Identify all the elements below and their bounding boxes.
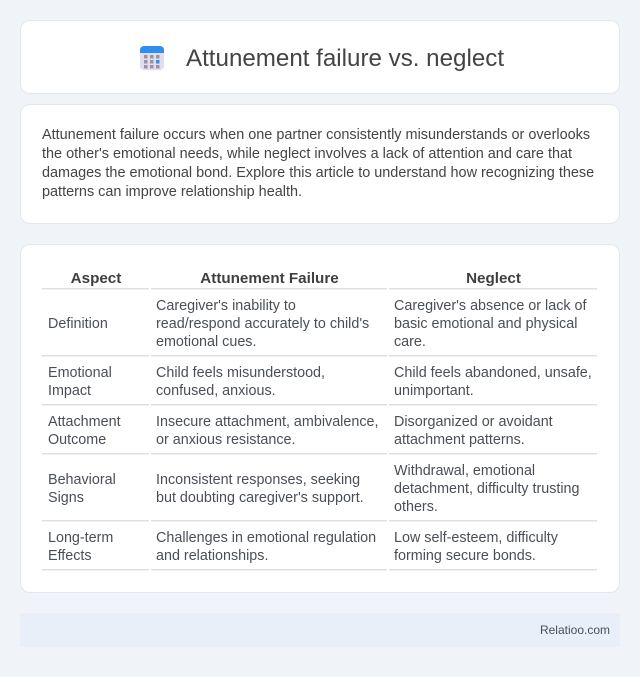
intro paragraph: Attunement failure occurs when one partner consistently misunderstands or overlooks xyxy=(42,127,590,143)
row: Long-term Effects: Effects xyxy=(48,548,92,564)
row: Emotional Impact: Child feels abandoned, unsafe, xyxy=(394,365,592,381)
row: Behavioral Signs: Withdrawal, emotional xyxy=(394,463,535,479)
row: Emotional Impact: Emotional xyxy=(48,365,112,381)
row: Long-term Effects: Long-term xyxy=(48,530,113,546)
row: Emotional Impact: confused, anxious. xyxy=(156,383,276,399)
panel: comparison table xyxy=(20,244,620,593)
row: Emotional Impact: Child feels misunderstood, xyxy=(156,365,325,381)
row: Long-term Effects xyxy=(48,530,558,564)
row: Emotional Impact: unimportant. xyxy=(394,383,474,399)
row: Definition: Caregiver's absence or lack of xyxy=(394,298,586,314)
row: Definition: Caregiver's inability to xyxy=(156,298,296,314)
footer credit: Relatioo.com xyxy=(540,623,610,637)
row: Behavioral Signs: Behavioral xyxy=(48,472,116,488)
row: Long-term Effects: and relationships. xyxy=(156,548,268,564)
row: Behavioral Signs: but doubting caregiver's support. xyxy=(156,490,364,506)
intro paragraph: patterns can improve relationship health. xyxy=(42,184,302,200)
table header: Aspect xyxy=(71,270,121,287)
row: Long-term Effects: forming secure bonds. xyxy=(394,548,536,564)
row: Behavioral Signs: Inconsistent responses, seeking xyxy=(156,472,360,488)
icon: calendar xyxy=(140,46,164,70)
row: Attachment Outcome: Insecure attachment, ambivalence, xyxy=(156,414,378,430)
row: Long-term Effects: Low self-esteem, difficulty xyxy=(394,530,558,546)
row: Emotional Impact: Impact xyxy=(48,383,91,399)
intro paragraph xyxy=(42,127,594,200)
row: Behavioral Signs xyxy=(48,463,580,515)
footer bar xyxy=(20,613,620,647)
row: Definition: emotional cues. xyxy=(156,334,256,350)
table header: Attunement Failure xyxy=(200,270,339,287)
table header xyxy=(71,270,521,287)
panel: title card xyxy=(20,20,620,94)
row: Emotional Impact xyxy=(48,365,592,399)
title: Attunement failure vs. neglect xyxy=(186,45,504,72)
row: Long-term Effects: Challenges in emotional regulation xyxy=(156,530,376,546)
row: Attachment Outcome: Outcome xyxy=(48,432,106,448)
row: Attachment Outcome: Attachment xyxy=(48,414,121,430)
intro paragraph: damages the emotional bond. Explore this article to understand how recognizing these xyxy=(42,165,594,181)
row: Attachment Outcome xyxy=(48,414,553,448)
table header: Neglect xyxy=(466,270,521,287)
row: Definition: read/respond accurately to child's xyxy=(156,316,369,332)
row: Behavioral Signs: Signs xyxy=(48,490,84,506)
row: Attachment Outcome: or anxious resistance. xyxy=(156,432,296,448)
row: Definition: basic emotional and physical xyxy=(394,316,577,332)
row: Definition: care. xyxy=(394,334,426,350)
row: Attachment Outcome: attachment patterns. xyxy=(394,432,525,448)
row: Definition xyxy=(48,298,586,350)
row: Definition: Definition xyxy=(48,316,108,332)
intro paragraph: the other's emotional needs, while neglect involves a lack of attention and care that xyxy=(42,146,572,162)
row: Behavioral Signs: detachment, difficulty trusting xyxy=(394,481,580,497)
panel: intro text xyxy=(20,104,620,224)
row: Attachment Outcome: Disorganized or avoidant xyxy=(394,414,553,430)
row: Behavioral Signs: others. xyxy=(394,499,438,515)
